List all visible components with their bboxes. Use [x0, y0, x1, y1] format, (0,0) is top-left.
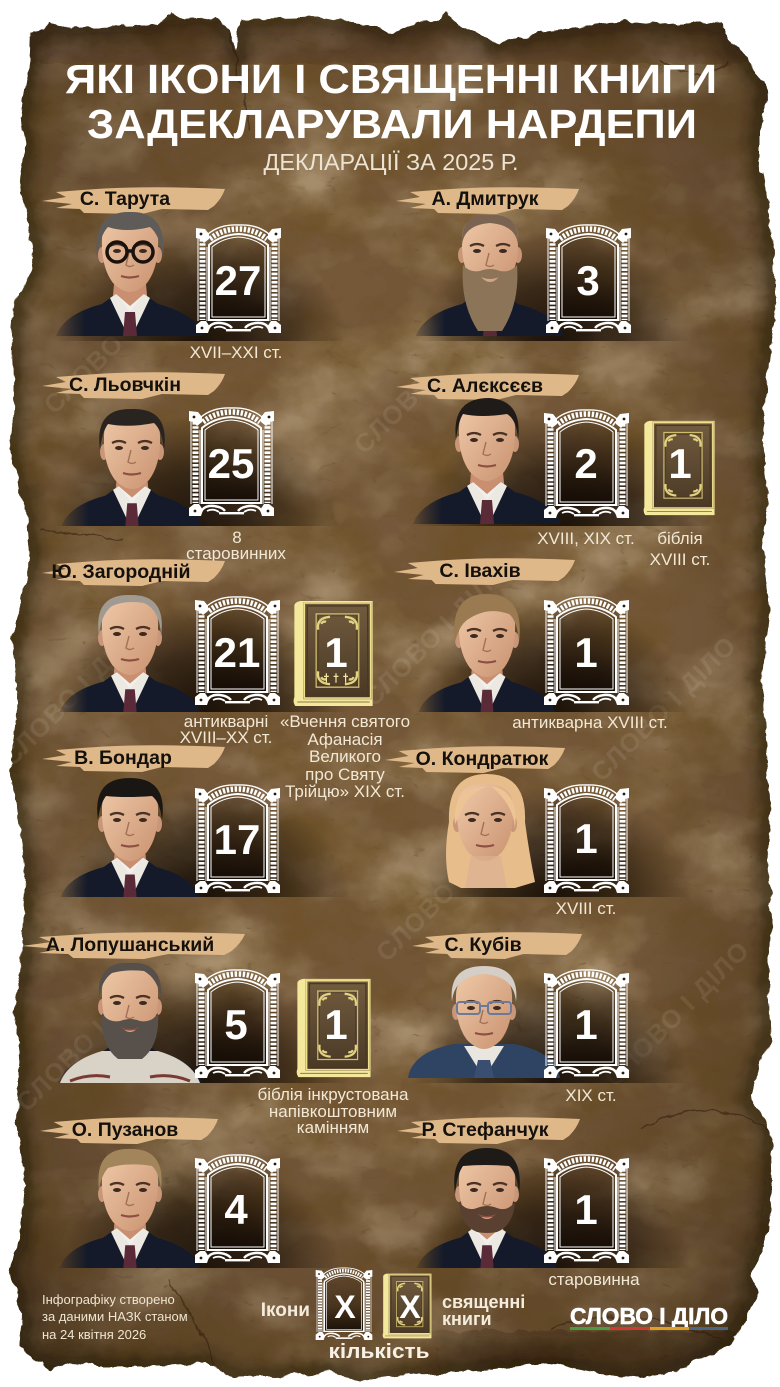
icon frame	[544, 785, 629, 893]
icon frame	[544, 1155, 629, 1263]
watermarks: СЛОВО І ДІЛО	[585, 630, 742, 787]
name label: О. Пузанов	[72, 1119, 178, 1141]
icon frame	[195, 597, 280, 705]
book count: 1	[324, 629, 348, 676]
name label: А. Дмитрук	[431, 188, 539, 210]
book count: 1	[668, 440, 692, 487]
name label: С. Кубів	[444, 934, 522, 956]
portrait	[419, 594, 555, 712]
panel: Ю. Загородній	[42, 559, 410, 801]
source note: за даними НАЗК станом	[42, 1309, 188, 1324]
caption: book: про Святу	[305, 765, 385, 784]
name label: В. Бондар	[74, 747, 172, 769]
watermarks: СЛОВО І ДІЛО	[10, 960, 167, 1117]
name label	[394, 558, 575, 585]
name label	[385, 746, 565, 773]
name label: О. Кондратюк	[416, 748, 549, 770]
portrait	[61, 778, 199, 897]
legend	[261, 1268, 525, 1363]
legend: book icon	[383, 1274, 431, 1338]
title: ЯКІ ІКОНИ І СВЯЩЕННІ КНИГИ	[65, 56, 717, 102]
icon frame	[195, 970, 280, 1078]
icon count: 1	[574, 629, 598, 676]
portrait	[60, 1149, 200, 1268]
subtitle: ДЕКЛАРАЦІЇ ЗА 2025 Р.	[264, 149, 518, 175]
caption: напівкоштовним	[269, 1102, 397, 1121]
icon frame	[546, 225, 631, 333]
portrait	[417, 1148, 557, 1268]
caption: камінням	[297, 1118, 369, 1137]
watermarks: СЛОВО І ДІЛО	[370, 810, 527, 967]
name label	[396, 373, 579, 400]
caption: icons: антикварні	[184, 712, 268, 731]
icon count: 5	[224, 1001, 248, 1048]
icon count: 17	[214, 816, 260, 863]
watermarks: СЛОВО І ДІЛО	[357, 555, 514, 712]
legend: icon placeholder: Х	[334, 1289, 356, 1325]
caption: антикварна XVIII ст.	[512, 713, 668, 732]
icon count: 2	[574, 440, 598, 487]
panel: С. Кубів	[408, 932, 690, 1105]
title	[65, 56, 717, 147]
portrait	[446, 774, 535, 888]
book icon	[297, 979, 371, 1077]
caption: icons: XVIII, XIX ст.	[537, 529, 635, 548]
caption: book: біблія	[657, 529, 703, 548]
book count: 1	[324, 1001, 348, 1048]
icon count: 1	[574, 1001, 598, 1048]
crosses	[324, 673, 348, 683]
panel: С. Льовчкін	[42, 372, 340, 563]
legend: books label: книги	[442, 1309, 492, 1329]
name label	[22, 932, 245, 959]
legend: book placeholder: Х	[399, 1289, 421, 1325]
name label	[42, 187, 225, 214]
name label	[397, 1117, 580, 1144]
icon frame	[195, 785, 280, 893]
watermarks: СЛОВО	[38, 328, 130, 420]
legend: icons label: Ікони	[261, 1300, 310, 1321]
book icon	[294, 601, 373, 706]
panel: С. Івахів	[394, 558, 690, 732]
icon count: 1	[574, 815, 598, 862]
name label	[42, 559, 225, 586]
panel: С. Тарута	[42, 187, 345, 362]
caption: біблія інкрустована	[258, 1085, 409, 1104]
icon count: 25	[208, 440, 254, 487]
panel: О. Пузанов	[40, 1117, 340, 1268]
panel: О. Кондратюк	[385, 746, 690, 918]
icon count: 3	[576, 257, 600, 304]
name label	[42, 745, 225, 772]
icon frame	[196, 225, 281, 333]
panel: А. Дмитрук	[396, 187, 690, 341]
name label: Р. Стефанчук	[421, 1119, 549, 1141]
icon count: 4	[224, 1186, 248, 1233]
icon count: 27	[215, 257, 261, 304]
legend: books label: священні	[442, 1292, 525, 1312]
portrait	[58, 963, 202, 1083]
legend: quantity label: кількість	[328, 1341, 430, 1363]
caption: book: XVIII ст.	[650, 550, 710, 569]
name label	[396, 187, 579, 214]
panel: А. Лопушанський	[22, 932, 409, 1137]
name label: С. Льовчкін	[69, 374, 181, 396]
icon frame	[195, 1155, 280, 1263]
legend: icon frame	[316, 1268, 372, 1340]
caption: XIX ст.	[565, 1086, 617, 1105]
name label: С. Тарута	[80, 188, 170, 210]
source note: Інфографіку створено	[42, 1292, 175, 1307]
name label: С. Алєксєєв	[427, 375, 543, 397]
watermarks	[0, 328, 755, 1117]
icon frame	[189, 408, 274, 516]
panel: Р. Стефанчук	[397, 1117, 690, 1289]
name label: А. Лопушанський	[46, 934, 214, 956]
name label: С. Івахів	[439, 560, 521, 582]
panel: С. Алєксєєв	[396, 373, 715, 569]
source note	[42, 1292, 188, 1342]
portrait	[416, 215, 564, 336]
portrait	[413, 398, 561, 524]
portrait	[60, 595, 200, 712]
caption: book: Великого	[309, 747, 381, 766]
caption: book: Афанасія	[307, 730, 383, 749]
panel: В. Бондар	[42, 745, 350, 897]
icon count: 21	[214, 629, 260, 676]
name label	[40, 1117, 218, 1144]
book icon	[644, 421, 715, 515]
caption: XVIII ст.	[556, 899, 616, 918]
icon frame	[544, 597, 629, 705]
source note: на 24 квітня 2026	[42, 1327, 146, 1342]
icon frame	[544, 410, 629, 518]
watermarks: СЛОВО І ДІЛО	[598, 935, 755, 1092]
caption: старовинна	[548, 1270, 640, 1289]
name label: Ю. Загородній	[52, 561, 190, 583]
icon frame	[544, 970, 629, 1078]
caption: book: «Вчення святого	[280, 712, 410, 731]
caption: book: Трійцю» XIX ст.	[285, 782, 405, 801]
portrait	[62, 409, 202, 526]
caption: 8	[232, 528, 242, 547]
watermarks: СЛОВО	[348, 368, 440, 460]
logo: СЛОВО І ДІЛО	[570, 1303, 728, 1329]
caption: icons: XVIII–XX ст.	[180, 728, 272, 747]
portrait	[408, 966, 560, 1078]
caption: старовинних	[186, 544, 286, 563]
portrait	[56, 212, 204, 336]
title: ЗАДЕКЛАРУВАЛИ НАРДЕПИ	[87, 101, 697, 147]
caption: XVII–XXI ст.	[190, 343, 282, 362]
name label	[412, 932, 582, 959]
icon count: 1	[574, 1186, 598, 1233]
name label	[42, 372, 225, 399]
